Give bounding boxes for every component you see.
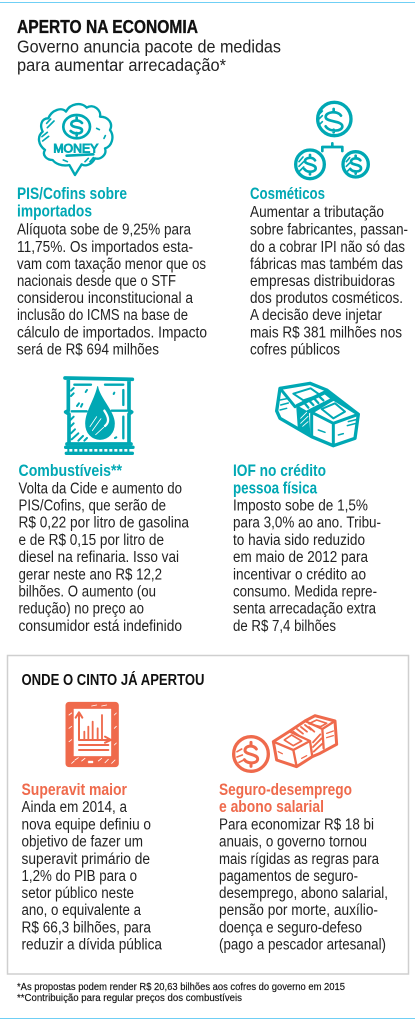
text block: consumidor está indefinido: [18, 618, 182, 635]
text block: [22, 799, 162, 954]
text block: to havia sido reduzido: [233, 532, 365, 549]
text block: pagamentos de seguro-: [219, 868, 358, 885]
icon: money thought bubble: MONEY: [53, 141, 98, 155]
text block: cofres públicos: [250, 342, 340, 359]
text block: cálculo de importados. Impacto: [17, 324, 207, 341]
subtitle: Governo anuncia pacote de medidas: [17, 36, 281, 56]
text block: Ainda em 2014, a: [22, 799, 127, 816]
text block: (pago a pescador artesanal): [219, 936, 386, 954]
text block: bilhões. O aumento (ou: [18, 584, 156, 600]
text block: PIS/Cofins, que serão de: [18, 498, 166, 514]
text block: nova equipe definiu o: [22, 816, 151, 833]
panel: PIS/Cofins: [17, 104, 207, 359]
text block: Aumentar a tributação: [250, 204, 384, 221]
text block: [219, 816, 388, 954]
panel: IOF: [233, 383, 381, 635]
text block: reduzir a dívida pública: [22, 936, 162, 954]
text block: gerar neste ano R$ 12,2: [18, 566, 162, 583]
text block: empresas distribuidoras: [250, 273, 395, 290]
text block: [250, 204, 408, 359]
text block: senta arrecadação extra: [233, 601, 376, 618]
text block: será de R$ 694 milhões: [17, 342, 159, 359]
text block: [17, 222, 207, 359]
text block: nacionais desde que o STF: [17, 273, 176, 290]
text block: incentivar o crédito ao: [233, 566, 366, 583]
text block: [18, 480, 189, 635]
text block: inclusão do ICMS na base de: [17, 307, 188, 324]
icon: stack of banknotes: [277, 383, 358, 446]
box heading: ONDE O CINTO JÁ APERTOU: [22, 670, 204, 689]
header: [17, 17, 281, 75]
text block: em maio de 2012 para: [233, 549, 368, 566]
text block: diesel na refinaria. Isso vai: [18, 549, 179, 566]
icon: coin and banknotes: [234, 716, 337, 771]
text block: considerou inconstitucional a: [17, 290, 193, 307]
footnotes: **Contribuição para regular preços dos combustíveis: [17, 993, 242, 1004]
text block: R$ 0,22 por litro de gasolina: [18, 515, 189, 532]
text block: e de R$ 0,15 por litro de: [18, 532, 164, 549]
heading: Superavit maior: [22, 781, 127, 799]
text block: [233, 498, 381, 635]
icon: tablet with chart: [66, 702, 118, 767]
text block: objetivo de fazer um: [22, 834, 143, 851]
text block: setor público neste: [22, 885, 134, 902]
subtitle: [17, 36, 281, 75]
text block: doença e seguro-defeso: [219, 920, 362, 936]
text block: Para economizar R$ 18 bi: [219, 816, 374, 833]
text block: A decisão deve injetar: [250, 307, 382, 324]
subtitle: para aumentar arrecadação*: [17, 55, 226, 75]
heading: Seguro-desemprego: [219, 781, 352, 799]
heading: [17, 185, 127, 221]
heading: [219, 781, 352, 816]
text block: anuais, o governo tornou: [219, 834, 367, 851]
text block: superavit primário de: [22, 851, 150, 868]
panel: Combustíveis: [18, 378, 189, 635]
heading: IOF no crédito: [233, 462, 326, 480]
heading: importados: [17, 203, 92, 221]
heading: PIS/Cofins sobre: [17, 185, 127, 203]
text block: 11,75%. Os importados esta-: [17, 239, 193, 256]
heading: Cosméticos: [250, 185, 325, 203]
text block: desemprego, abono salarial,: [219, 885, 388, 902]
text block: redução) no preço ao: [18, 601, 144, 618]
heading: [233, 462, 326, 497]
footnotes: *As propostas podem render R$ 20,63 bilhões aos cofres do governo em 2015: [17, 982, 345, 993]
panel: Cosméticos: [250, 102, 408, 359]
heading: Combustíveis**: [18, 462, 122, 480]
icon: money thought bubble: [39, 104, 112, 175]
text block: 1,2% do PIB para o: [22, 868, 137, 885]
footnotes: [17, 982, 345, 1004]
icon: oil barrel with drop: [65, 378, 133, 454]
title: APERTO NA ECONOMIA: [17, 17, 198, 37]
text block: Imposto sobe de 1,5%: [233, 498, 368, 514]
text block: Volta da Cide e aumento do: [18, 480, 182, 497]
text block: ano, o equivalente a: [22, 902, 141, 919]
heading: pessoa física: [233, 479, 318, 497]
text block: Alíquota sobe de 9,25% para: [17, 222, 191, 239]
text block: vam com taxação menor que os: [17, 256, 206, 273]
text block: consumo. Medida repre-: [233, 584, 377, 600]
text block: R$ 66,3 bilhões, para: [22, 920, 151, 936]
text block: pensão por morte, auxílio-: [219, 902, 378, 919]
icon: coins hierarchy: [296, 102, 368, 179]
text block: de R$ 7,4 bilhões: [233, 618, 336, 635]
heading: e abono salarial: [219, 798, 324, 816]
text block: mais rígidas as regras para: [219, 851, 379, 868]
panel: onde o cinto já apertou: [8, 656, 408, 974]
text block: para 3,0% ao ano. Tribu-: [233, 515, 381, 532]
